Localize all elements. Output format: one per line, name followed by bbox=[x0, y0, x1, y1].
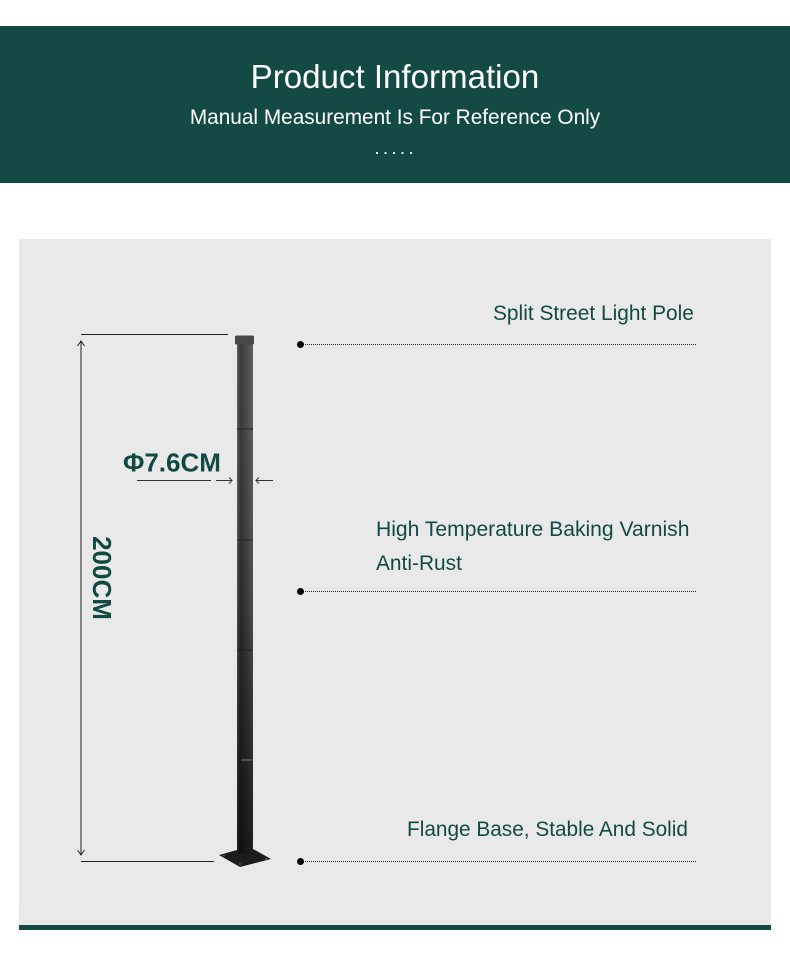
leader line: top bbox=[297, 341, 696, 348]
pole shaft bbox=[237, 342, 253, 854]
label: split street light pole: Split Street Light Pole bbox=[493, 302, 694, 325]
height dimension line bbox=[78, 334, 228, 862]
header banner bbox=[0, 26, 790, 183]
pole base plate bbox=[219, 849, 271, 867]
bottom accent bar bbox=[19, 925, 771, 930]
decorative dots bbox=[376, 152, 414, 154]
panel: product diagram bbox=[19, 239, 771, 930]
leader line: bottom bbox=[297, 858, 696, 865]
pole bbox=[219, 336, 271, 867]
height label: 200CM bbox=[87, 536, 117, 620]
subtitle: Manual Measurement Is For Reference Only bbox=[190, 106, 600, 129]
title: Product Information bbox=[251, 59, 539, 96]
pole cap bbox=[235, 336, 254, 344]
label: baking varnish: High Temperature Baking Varnish bbox=[376, 518, 689, 541]
diameter arrows bbox=[137, 478, 273, 484]
diameter label: Φ7.6CM bbox=[123, 448, 221, 478]
label: flange base: Flange Base, Stable And Solid bbox=[407, 818, 688, 841]
leader line: middle bbox=[297, 588, 696, 595]
label: anti-rust: Anti-Rust bbox=[376, 552, 462, 575]
